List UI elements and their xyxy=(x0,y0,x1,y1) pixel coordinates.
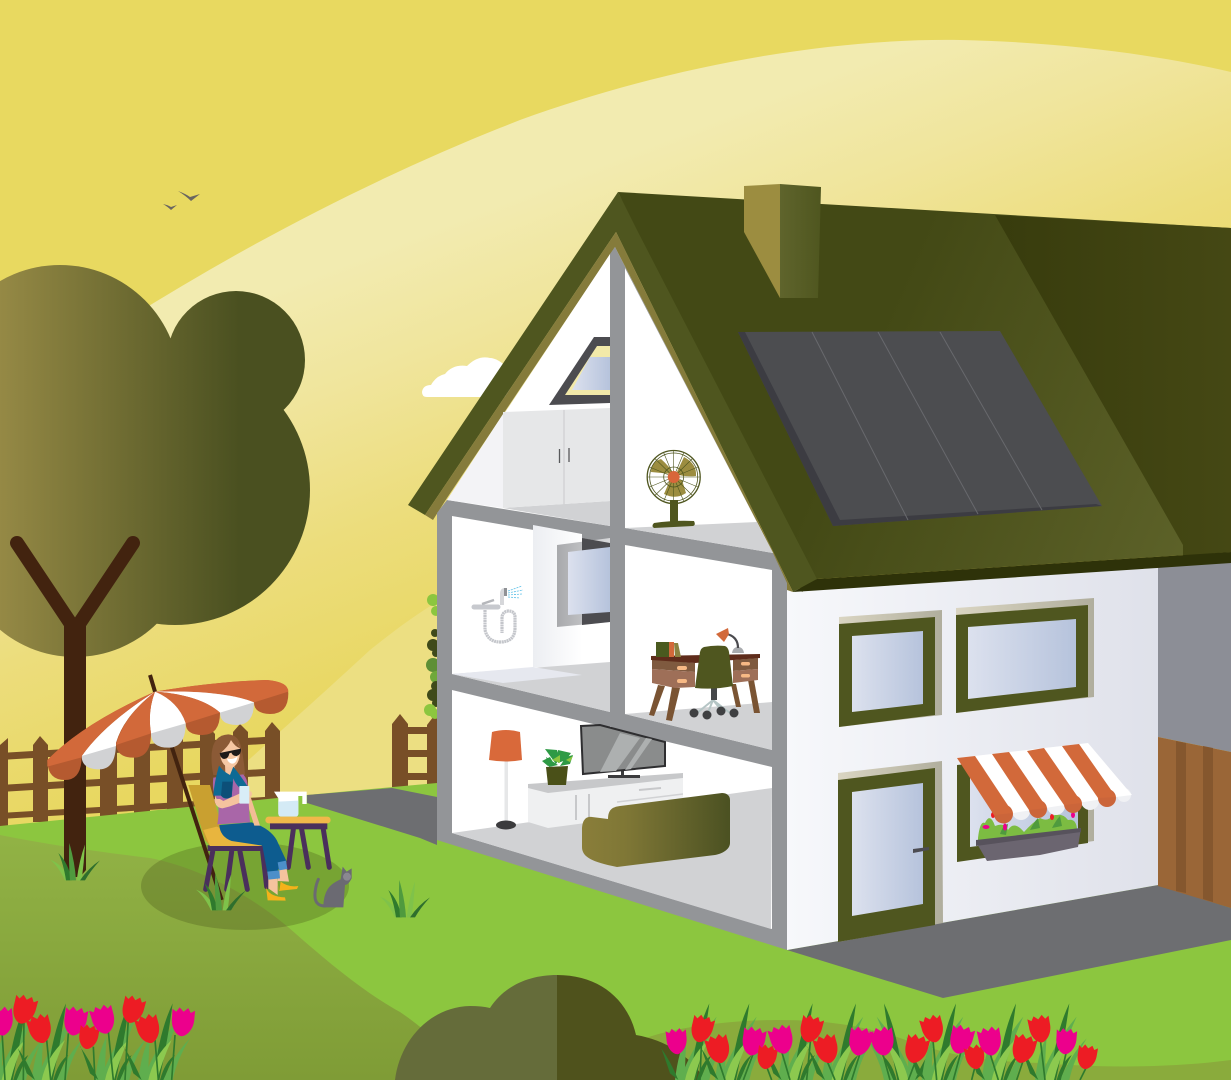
upper left window xyxy=(839,610,942,727)
distant hill xyxy=(0,40,1231,830)
awning xyxy=(957,743,1132,824)
sofa xyxy=(582,793,730,867)
shower mat xyxy=(452,667,582,683)
forearm xyxy=(214,791,252,808)
bathroom floor xyxy=(452,662,610,712)
rafter olive strip xyxy=(425,232,793,592)
floor lamp xyxy=(489,730,522,830)
right arm xyxy=(245,795,260,826)
office room xyxy=(625,545,772,750)
flower box xyxy=(976,812,1081,861)
panel 1 xyxy=(47,692,155,780)
birds xyxy=(163,191,200,210)
potted plant xyxy=(542,749,573,785)
jeans xyxy=(219,822,287,872)
grass tuft near tree xyxy=(50,843,100,880)
desk lamp xyxy=(716,628,744,653)
tulip bed left xyxy=(0,993,195,1080)
upper right window xyxy=(956,598,1094,713)
roof rafter trim xyxy=(408,192,817,592)
jeans cuffs xyxy=(267,870,280,880)
chair xyxy=(188,785,267,889)
books xyxy=(656,642,681,657)
panel 6 xyxy=(155,691,254,725)
door xyxy=(838,761,943,942)
panel 6 light xyxy=(155,691,254,713)
tree trunk xyxy=(17,543,133,877)
face xyxy=(220,740,240,768)
far foot xyxy=(278,868,289,882)
lower window xyxy=(957,750,1094,862)
leaves right xyxy=(660,1003,1087,1080)
ground xyxy=(0,783,1231,1080)
fence right xyxy=(392,712,437,788)
umbrella pole xyxy=(172,747,222,900)
bush xyxy=(395,975,705,1080)
tv xyxy=(581,725,665,778)
jug xyxy=(274,792,307,817)
attic right floor xyxy=(625,522,773,553)
purple top xyxy=(213,774,250,824)
house xyxy=(408,184,1231,950)
solar panel xyxy=(738,331,1102,526)
panel 5 xyxy=(155,692,220,735)
panel 2 xyxy=(82,692,155,769)
attic right room xyxy=(625,268,773,553)
center wall xyxy=(610,247,625,727)
grass tuft right xyxy=(380,880,430,917)
tulips left xyxy=(0,993,195,1051)
fringe xyxy=(220,737,240,753)
bush light half xyxy=(395,975,557,1080)
smile xyxy=(227,756,238,764)
scarf shadow xyxy=(221,782,233,798)
near shoe xyxy=(266,887,286,901)
driveway left xyxy=(307,788,437,845)
attic floor xyxy=(503,501,610,526)
panel 3 light xyxy=(116,692,155,745)
glass xyxy=(239,786,249,804)
table xyxy=(265,817,331,867)
panel 1 light xyxy=(47,692,155,767)
darker lawn hill right xyxy=(640,1020,1231,1080)
fence left xyxy=(0,722,280,826)
cat xyxy=(315,867,352,907)
roof dark right side xyxy=(995,215,1231,556)
bathroom room xyxy=(452,516,610,712)
panel 4 light xyxy=(150,692,186,733)
darker lawn hill left xyxy=(0,835,490,1080)
office floor xyxy=(625,702,772,750)
wardrobe xyxy=(503,408,610,508)
tulip bed right xyxy=(660,1003,1098,1080)
shower fixture xyxy=(474,586,523,642)
shower wall xyxy=(533,525,582,667)
skylight xyxy=(549,337,610,405)
roof main xyxy=(618,192,1231,592)
tv unit xyxy=(528,773,730,828)
panel 2 light xyxy=(82,692,155,756)
neck xyxy=(225,764,235,780)
umbrella tip xyxy=(150,675,155,692)
front wall xyxy=(787,566,1158,950)
cutaway frame xyxy=(437,247,787,950)
living room floor xyxy=(452,788,772,929)
tree canopy xyxy=(0,265,310,657)
stems right xyxy=(700,1037,1087,1080)
attic side wall xyxy=(447,414,503,508)
panel 7 xyxy=(155,680,288,714)
far shoe xyxy=(277,880,298,891)
door handle xyxy=(913,847,929,853)
driveway front xyxy=(787,885,1231,998)
leaves left xyxy=(0,1003,190,1080)
panel 5 light xyxy=(155,692,220,723)
gray side wall xyxy=(1158,555,1231,752)
panel 3 xyxy=(116,692,155,758)
sunglasses xyxy=(220,749,241,759)
attic left room xyxy=(447,254,610,526)
bathroom window xyxy=(557,538,610,627)
bush dark half xyxy=(557,975,705,1080)
climbing vine xyxy=(424,594,442,719)
hair xyxy=(212,734,245,775)
umbrella canopy xyxy=(47,675,288,780)
desk xyxy=(649,654,760,721)
cloud xyxy=(422,357,510,397)
woman xyxy=(212,734,298,901)
desk fan xyxy=(647,450,700,528)
scarf xyxy=(213,766,247,799)
living room xyxy=(452,690,772,929)
stems left xyxy=(2,1017,175,1080)
grass tuft near chair xyxy=(196,873,246,910)
table shadow xyxy=(141,842,349,930)
tulips right xyxy=(665,1013,1098,1071)
chimney xyxy=(744,184,821,298)
roof underside dark strip xyxy=(793,552,1231,592)
near foot xyxy=(268,878,278,895)
panel 7 light xyxy=(155,680,288,702)
office chair xyxy=(690,646,738,720)
wood fence panel xyxy=(1158,737,1231,908)
second hill xyxy=(190,600,440,815)
patio scene xyxy=(47,675,352,907)
panel 4 xyxy=(150,692,186,748)
